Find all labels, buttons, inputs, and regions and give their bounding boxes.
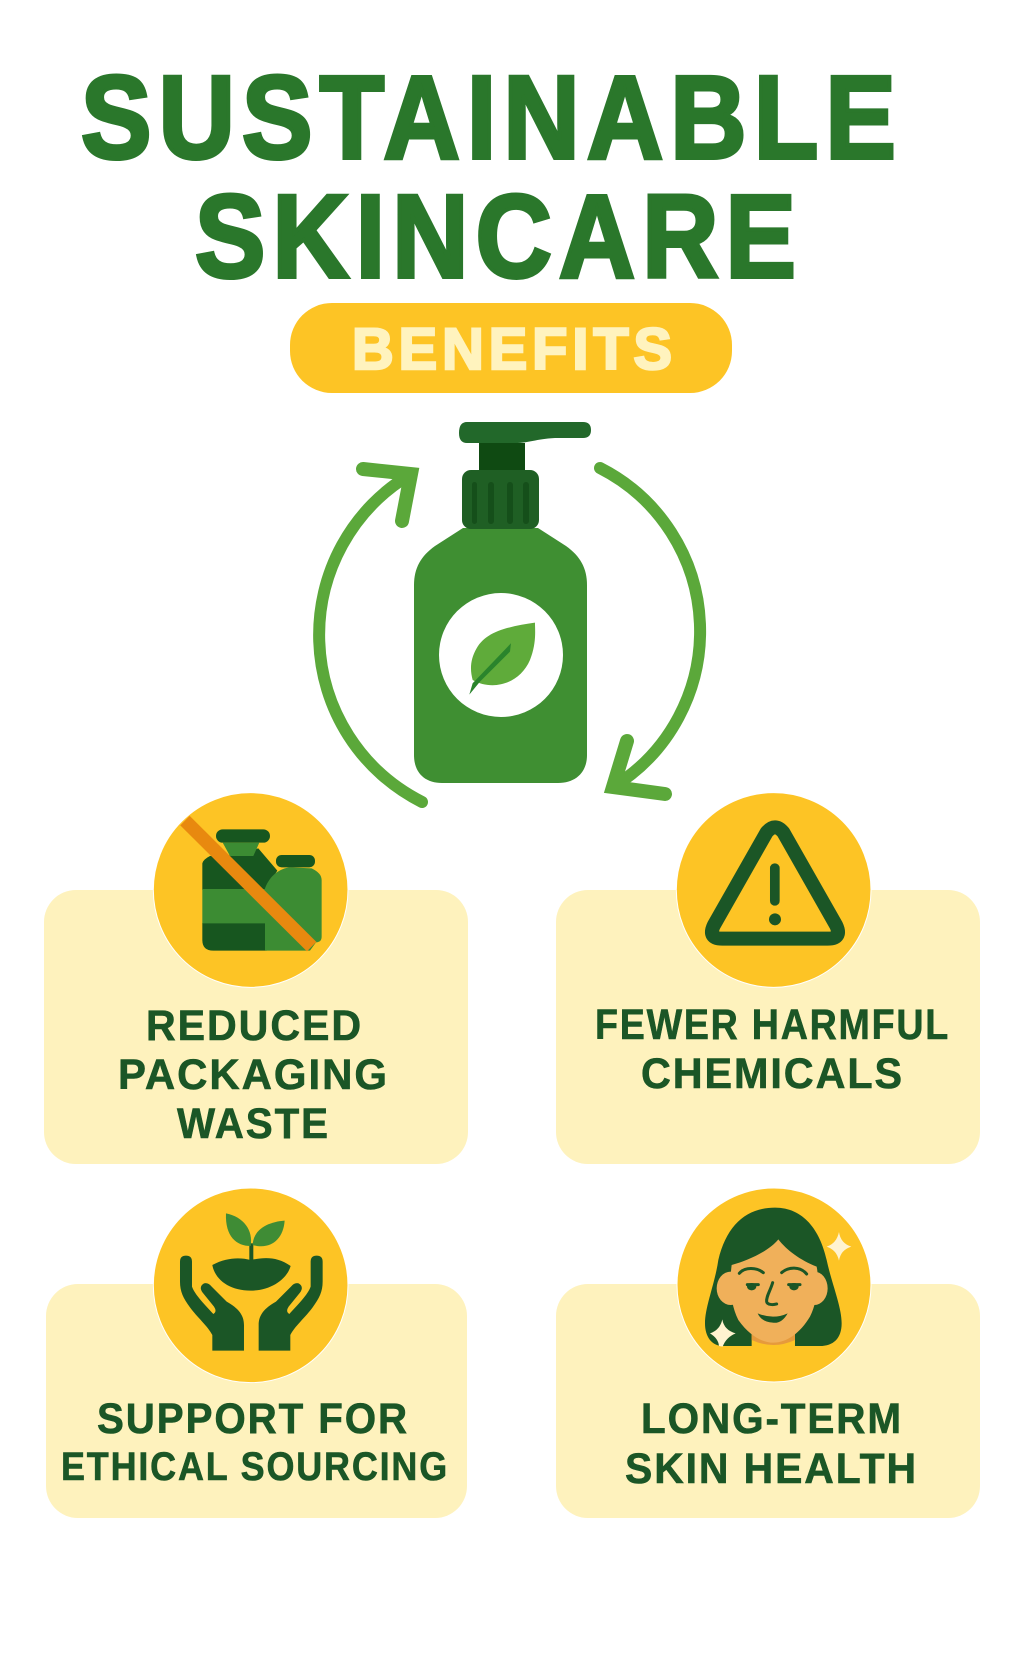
panel: fewer harmful chemicals xyxy=(556,793,980,1164)
badge: benefits xyxy=(290,303,732,393)
label: fewer harmful chemicals: CHEMICALS xyxy=(641,1050,904,1098)
icon: hands holding seedling xyxy=(153,1188,348,1383)
panel: support for ethical sourcing xyxy=(46,1188,467,1518)
label: support for ethical sourcing xyxy=(61,1395,449,1489)
title: SKINCARE xyxy=(195,171,803,303)
label: long-term skin health xyxy=(625,1395,918,1493)
panel: reduced packaging waste xyxy=(44,793,468,1164)
title xyxy=(81,52,903,303)
label: support for ethical sourcing: SUPPORT FOR xyxy=(97,1395,409,1443)
label: reduced packaging waste xyxy=(118,1002,389,1148)
label: reduced packaging waste: REDUCED xyxy=(146,1002,363,1050)
label: reduced packaging waste: WASTE xyxy=(177,1100,330,1148)
label: long-term skin health: LONG-TERM xyxy=(641,1395,903,1443)
title: SUSTAINABLE xyxy=(81,52,903,184)
icon: smiling face with sparkles xyxy=(677,1188,871,1382)
label: long-term skin health: SKIN HEALTH xyxy=(625,1445,918,1493)
label: fewer harmful chemicals xyxy=(595,1001,950,1098)
label: fewer harmful chemicals: FEWER HARMFUL xyxy=(595,1001,950,1049)
icon: crossed-out packaging xyxy=(153,793,348,987)
label: reduced packaging waste: PACKAGING xyxy=(118,1051,389,1099)
icon: recycling arrows xyxy=(319,468,700,802)
icon: warning triangle xyxy=(676,793,871,987)
label: support for ethical sourcing: ETHICAL SOURCING xyxy=(61,1445,449,1489)
panel: long-term skin health xyxy=(556,1188,980,1518)
icon: pump bottle xyxy=(414,422,591,783)
badge: benefits: BENEFITS xyxy=(352,317,677,382)
